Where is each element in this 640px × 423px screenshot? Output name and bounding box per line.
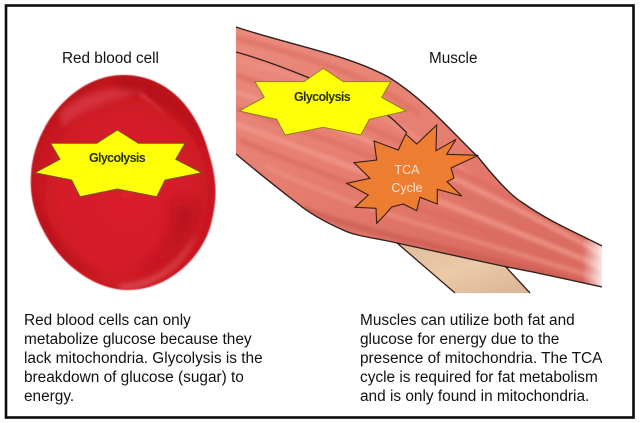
text block: red blood cell explanation: breakdown of glucose (sugar) to xyxy=(24,369,244,386)
text block: muscle explanation: and is only found in mitochondria. xyxy=(360,388,589,405)
text block: red blood cell explanation xyxy=(24,312,263,405)
icon: tendon xyxy=(396,242,530,293)
callout: glycolysis star xyxy=(35,130,202,197)
text block: muscle explanation: glucose for energy due to the xyxy=(360,331,559,348)
callout: glycolysis star: Glycolysis xyxy=(294,90,351,104)
heading: red blood cell: Red blood cell xyxy=(62,50,159,67)
text block: red blood cell explanation: lack mitochondria. Glycolysis is the xyxy=(24,350,263,367)
icon: muscle xyxy=(236,27,610,293)
callout: glycolysis star xyxy=(239,68,406,135)
callout: TCA cycle star: TCA xyxy=(394,163,420,177)
text block: red blood cell explanation: Red blood cells can only xyxy=(24,312,191,329)
text block: red blood cell explanation: metabolize glucose because they xyxy=(24,331,252,348)
text block: red blood cell explanation: energy. xyxy=(24,388,74,405)
icon: red blood cell disc xyxy=(30,75,215,290)
text block: muscle explanation: Muscles can utilize both fat and xyxy=(360,312,575,329)
heading: muscle: Muscle xyxy=(429,50,477,67)
panel: muscle xyxy=(236,27,610,293)
panel: red blood cell xyxy=(30,50,215,290)
text block: muscle explanation: presence of mitochondria. The TCA xyxy=(360,350,603,367)
text block: muscle explanation xyxy=(360,312,603,405)
callout: TCA cycle star: Cycle xyxy=(391,181,423,195)
callout: TCA cycle star xyxy=(347,125,478,223)
callout: glycolysis star: Glycolysis xyxy=(89,151,146,165)
text block: muscle explanation: cycle is required for fat metabolism xyxy=(360,369,598,386)
